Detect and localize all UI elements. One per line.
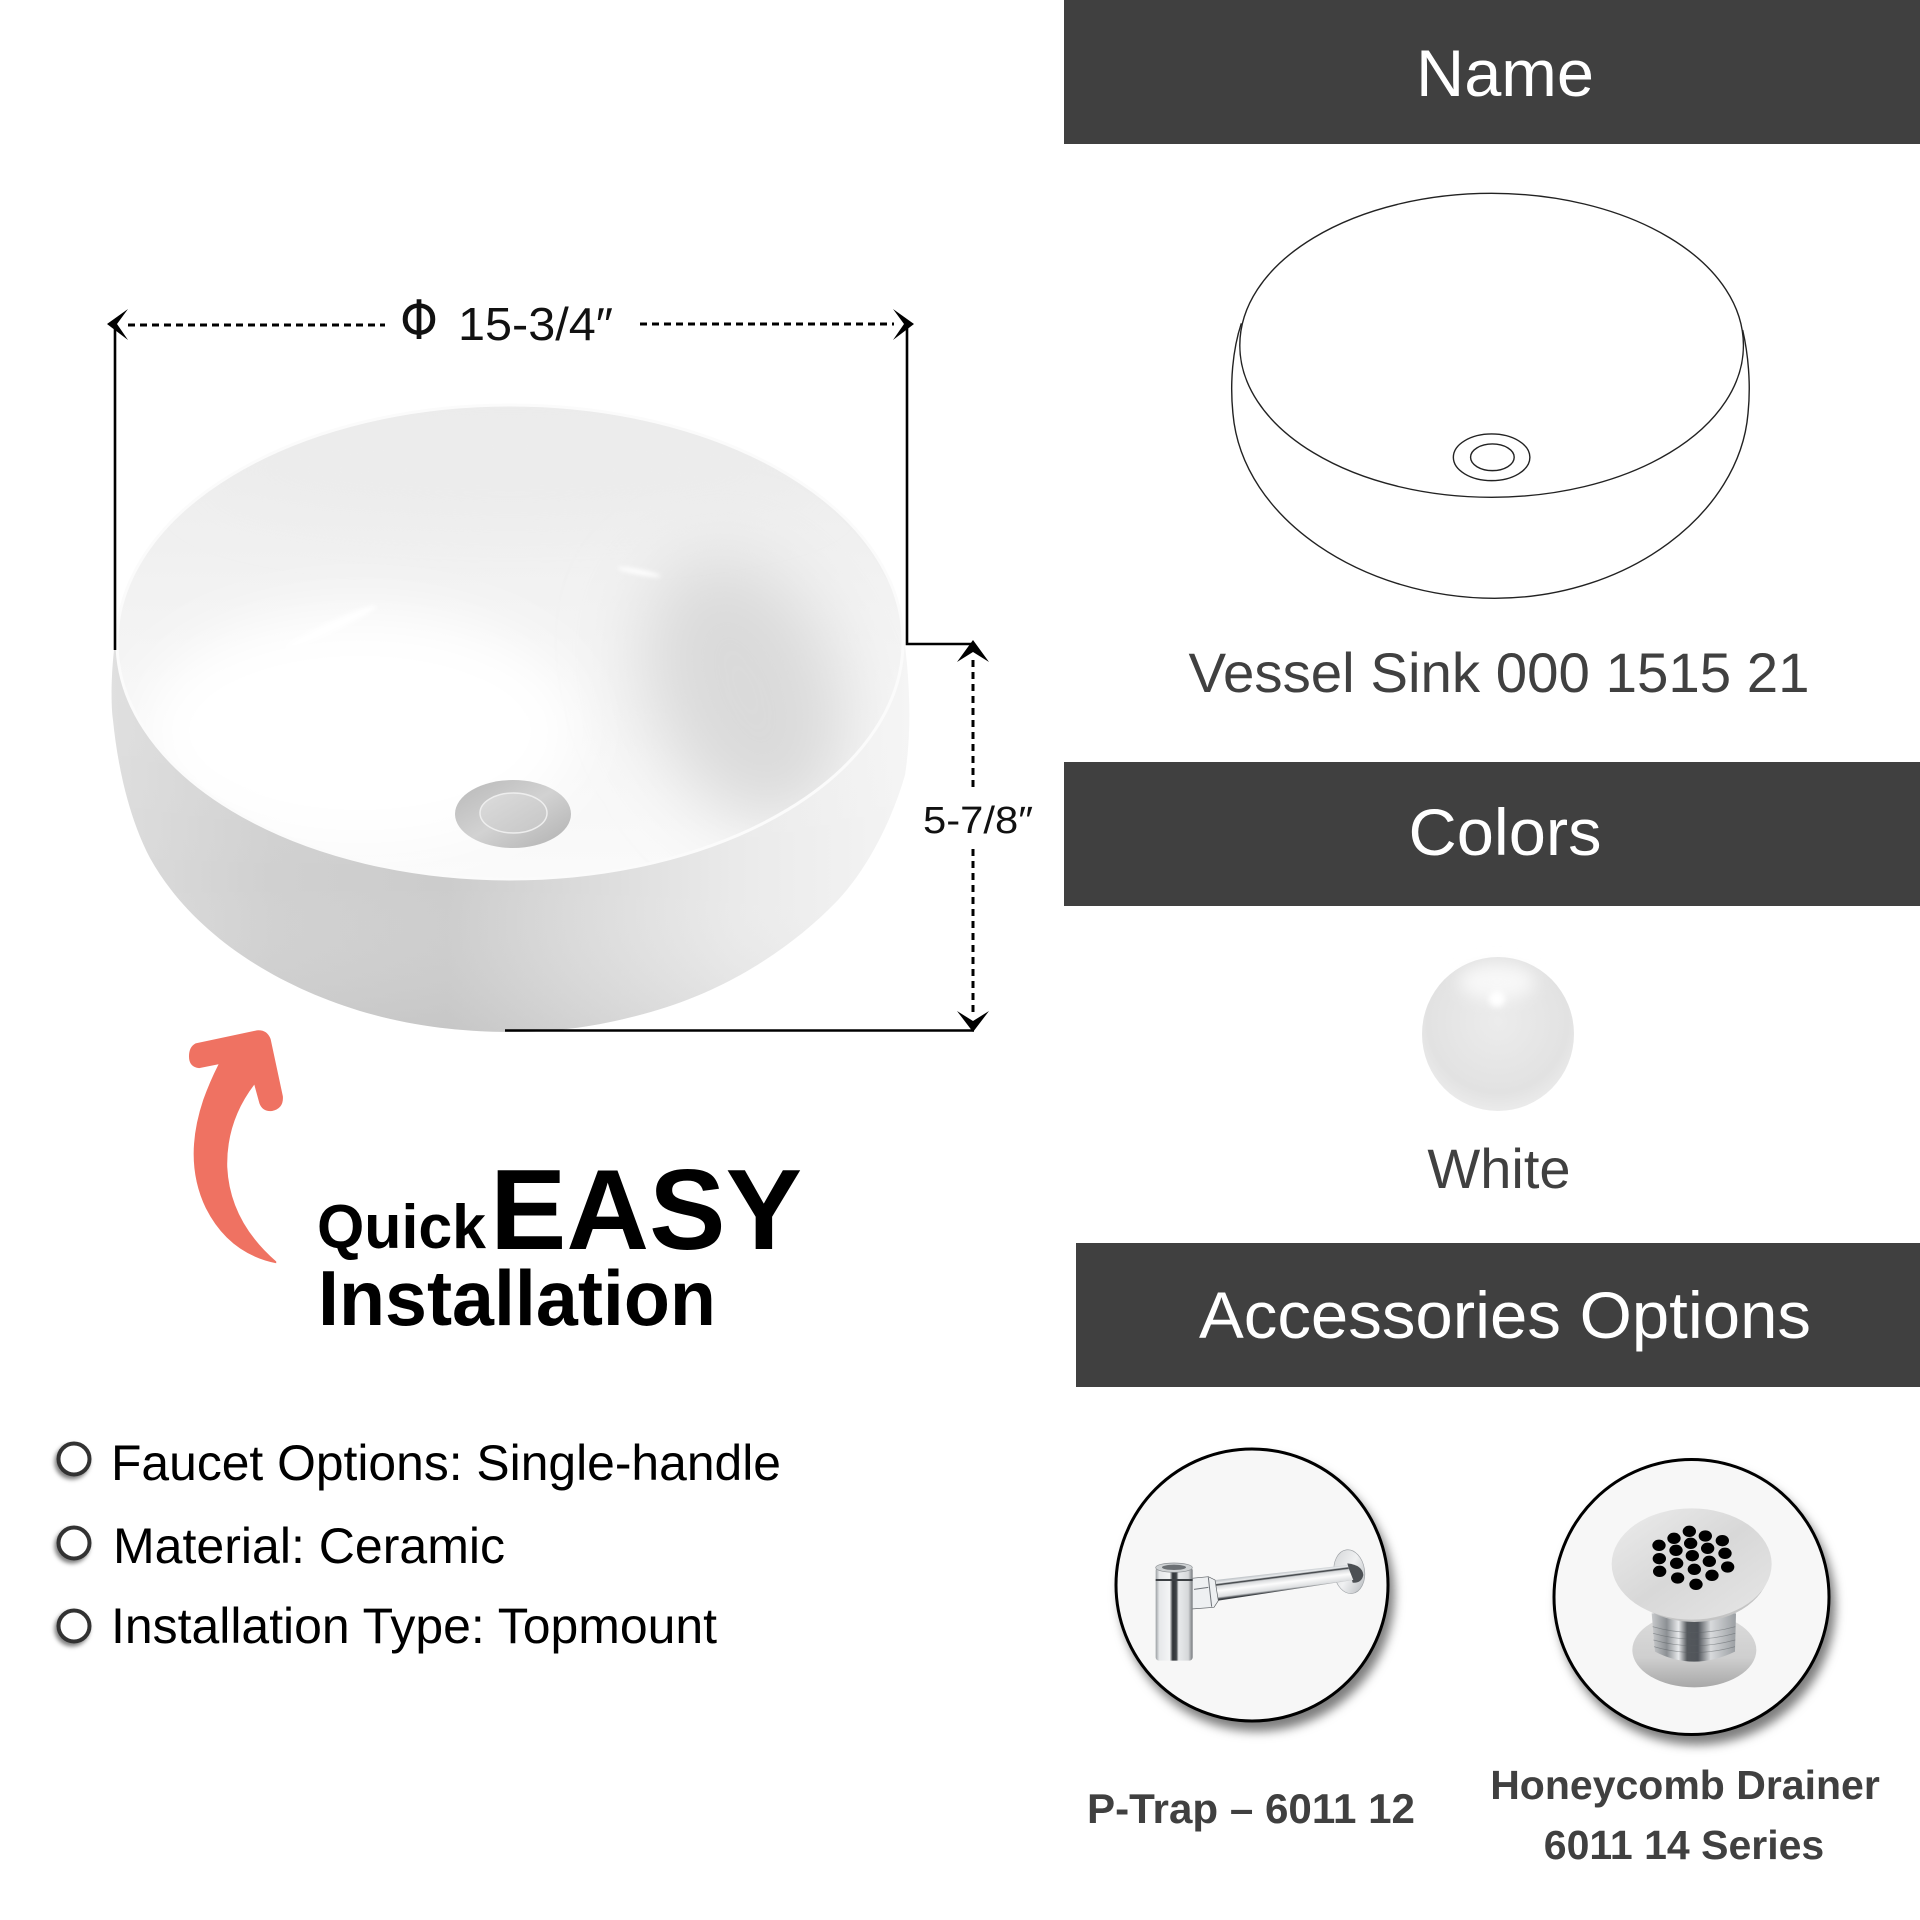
- header: Name: [1064, 0, 1920, 144]
- arrow: curved coral: [189, 1030, 283, 1263]
- rim highlight: [117, 405, 903, 879]
- height label: 5-7/8″: [923, 800, 1033, 842]
- label: Honeycomb Drainer: Honeycomb Drainer: [1490, 1762, 1880, 1808]
- item: faucet options: Faucet Options: Single-handle: [111, 1435, 781, 1491]
- sink bowl: [117, 405, 903, 879]
- colour label: White: [1427, 1137, 1571, 1200]
- photo: white vessel sink: [112, 405, 909, 1032]
- header: Colors: Colors: [1408, 795, 1602, 869]
- icon: drainer: [1612, 1508, 1772, 1687]
- dimension: height: [505, 640, 1033, 1032]
- circle: [1554, 1460, 1829, 1734]
- heading: Quick EASY Installation: [317, 1147, 802, 1342]
- dotted lines: [972, 660, 974, 1015]
- accessory: Honeycomb Drainer: [1554, 1460, 1829, 1734]
- diameter value: 15-3/4″: [458, 298, 613, 350]
- circle: [1116, 1449, 1388, 1721]
- header: Accessories Options: [1076, 1243, 1920, 1387]
- label: Honeycomb Drainer: [1490, 1762, 1880, 1868]
- icon: p-trap: [1156, 1548, 1368, 1661]
- header: Accessories Options: Accessories Options: [1199, 1278, 1811, 1352]
- dimension: diameter: [107, 289, 974, 650]
- header: Colors: [1064, 762, 1920, 906]
- arrowheads: [107, 309, 914, 340]
- drain outline: [1453, 434, 1530, 481]
- accessory: P-Trap: [1116, 1449, 1388, 1721]
- sink body: [112, 630, 909, 1032]
- heading: Quick EASY Installation: EASY: [490, 1147, 802, 1274]
- product name: Vessel Sink 000 1515 21: [1188, 641, 1810, 704]
- item: material: Material: Ceramic: [113, 1518, 505, 1574]
- heading: Quick EASY Installation: Quick: [317, 1193, 486, 1262]
- drain: [455, 780, 571, 848]
- line drawing of sink: [1232, 193, 1749, 598]
- feature list: [58, 1435, 781, 1654]
- baseline: [505, 1029, 974, 1032]
- header: Name: Name: [1416, 36, 1594, 110]
- rim outline: [1240, 193, 1743, 497]
- arrowheads: [957, 640, 989, 1032]
- body outline: [1232, 323, 1749, 598]
- dotted lines: [128, 324, 894, 325]
- heading: Quick EASY Installation: Installation: [318, 1254, 716, 1342]
- colour swatch: white: [1422, 957, 1574, 1111]
- extension lines: [115, 323, 974, 650]
- label: Honeycomb Drainer: 6011 14 Series: [1544, 1822, 1824, 1868]
- diameter label: Φ: [400, 289, 438, 352]
- item: installation type: Installation Type: Topmount: [111, 1598, 717, 1654]
- honeycomb holes: [1652, 1526, 1734, 1590]
- label: P-Trap: P-Trap – 6011 12: [1087, 1785, 1415, 1832]
